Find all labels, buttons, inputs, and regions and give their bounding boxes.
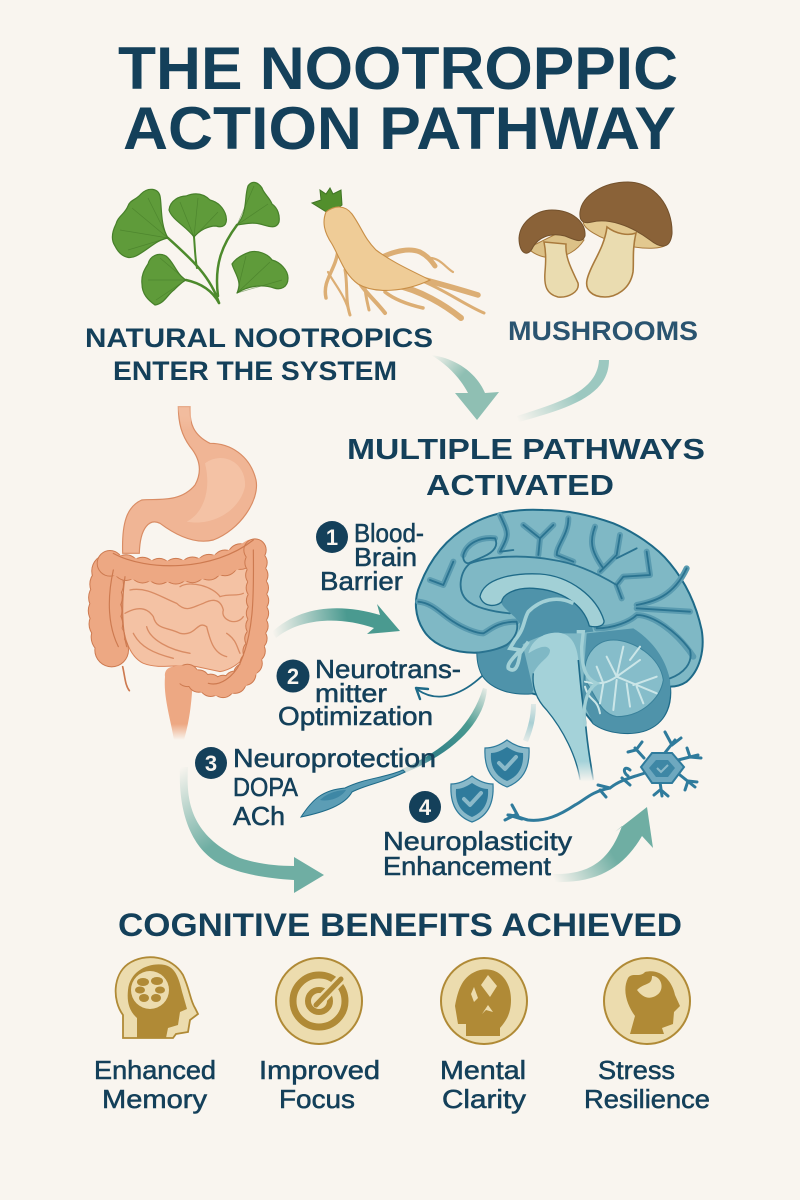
label 3: neuroprotection [195, 743, 436, 831]
benefit: mental clarity: Mental [440, 1055, 526, 1085]
title: THE NOOTROPPIC [118, 35, 678, 102]
rectum [165, 667, 193, 740]
arrow: nootropics to pathways [431, 355, 499, 420]
label 3: neuroprotection: Neuroprotection [233, 743, 436, 773]
benefit: mental clarity [440, 958, 527, 1114]
benefit: enhanced memory [94, 957, 216, 1114]
icon: ginkgo leaves [112, 182, 288, 305]
label 4: neuroplasticity enhancement: 4 [419, 795, 432, 820]
heading: natural nootropics: NATURAL NOOTROPICS [85, 323, 433, 353]
icon: neuron cell body [301, 770, 405, 817]
arrow: thin curved arrow to neurotransmitter [416, 676, 482, 699]
arrow: gut to benefits [180, 767, 324, 893]
small intestine [122, 567, 248, 672]
benefit: improved focus: Focus [279, 1084, 355, 1114]
label 3: neuroprotection: 3 [205, 751, 217, 776]
label 2: neurotransmitter optimization: mitter [315, 678, 387, 708]
label 2: neurotransmitter optimization: Neurotrans- [315, 654, 461, 684]
heading: natural nootropics: ENTER THE SYSTEM [113, 356, 397, 386]
benefit: stress resilience: Resilience [584, 1084, 710, 1114]
stomach [123, 406, 257, 553]
heading: multiple pathways [347, 434, 705, 502]
illustration: digestive system [105, 406, 258, 740]
small mushroom [519, 210, 585, 297]
icon: target [276, 958, 362, 1044]
label 3: neuroprotection: DOPA [233, 772, 299, 802]
benefit: mental clarity: Clarity [442, 1084, 526, 1114]
sulci shadows and lines [418, 515, 693, 678]
icon: head with brain [116, 957, 198, 1038]
title: ACTION PATHWAY [123, 95, 676, 162]
ventricle and thalamus [500, 589, 593, 647]
label 1: blood-brain barrier [316, 518, 424, 596]
label 2: neurotransmitter optimization: 2 [287, 664, 299, 689]
benefit: enhanced memory: Enhanced [94, 1055, 216, 1085]
arrow: swoosh to neuron cell [400, 688, 487, 774]
arrow: mushrooms to pathways [517, 360, 609, 422]
label 4: neuroplasticity enhancement: Neuroplasticity [383, 826, 572, 856]
icon: head with clarity [441, 958, 527, 1044]
heading: natural nootropics [85, 323, 433, 386]
temporal and cerebellum base [477, 628, 670, 733]
label 4: neuroplasticity enhancement [383, 791, 572, 881]
cerebellum [585, 640, 663, 717]
label 1: blood-brain barrier: Brain [354, 542, 417, 572]
icon: shield upper [485, 740, 529, 787]
corpus callosum [480, 574, 604, 627]
benefit: improved focus: Improved [259, 1055, 380, 1085]
label 1: blood-brain barrier: Blood- [354, 518, 424, 548]
large mushroom [580, 182, 672, 297]
arrow: neuroplasticity to neuron [553, 807, 653, 882]
benefit: improved focus [259, 958, 380, 1114]
arrow: gut to brain [272, 604, 400, 638]
label 4: neuroplasticity enhancement: Enhancement [383, 851, 552, 881]
icon: shield lower [451, 776, 493, 822]
label 2: neurotransmitter optimization [276, 654, 461, 731]
heading: mushrooms: MUSHROOMS [508, 316, 698, 346]
benefit: stress resilience [584, 958, 710, 1114]
fornix [508, 599, 573, 670]
icon: mushrooms [519, 182, 672, 297]
colon [105, 540, 258, 691]
icon: ginseng root [312, 188, 484, 318]
benefit: enhanced memory: Memory [102, 1084, 207, 1114]
icon: head with calm swirl [604, 958, 690, 1044]
label 1: blood-brain barrier: 1 [326, 525, 338, 550]
heading: multiple pathways: MULTIPLE PATHWAYS [347, 434, 705, 466]
heading: multiple pathways: ACTIVATED [426, 470, 614, 502]
label 2: neurotransmitter optimization: Optimization [278, 701, 433, 731]
arrow: faded short stroke [523, 704, 536, 742]
brainstem [528, 633, 594, 782]
illustration: brain [416, 510, 703, 782]
benefit: stress resilience: Stress [598, 1055, 675, 1085]
heading: cognitive benefits: COGNITIVE BENEFITS ACHIEVED [118, 907, 682, 943]
icon: neuron [505, 732, 701, 820]
label 1: blood-brain barrier: Barrier [320, 566, 403, 596]
cerebrum silhouette [416, 510, 703, 733]
label 3: neuroprotection: ACh [233, 801, 285, 831]
title [118, 35, 678, 162]
